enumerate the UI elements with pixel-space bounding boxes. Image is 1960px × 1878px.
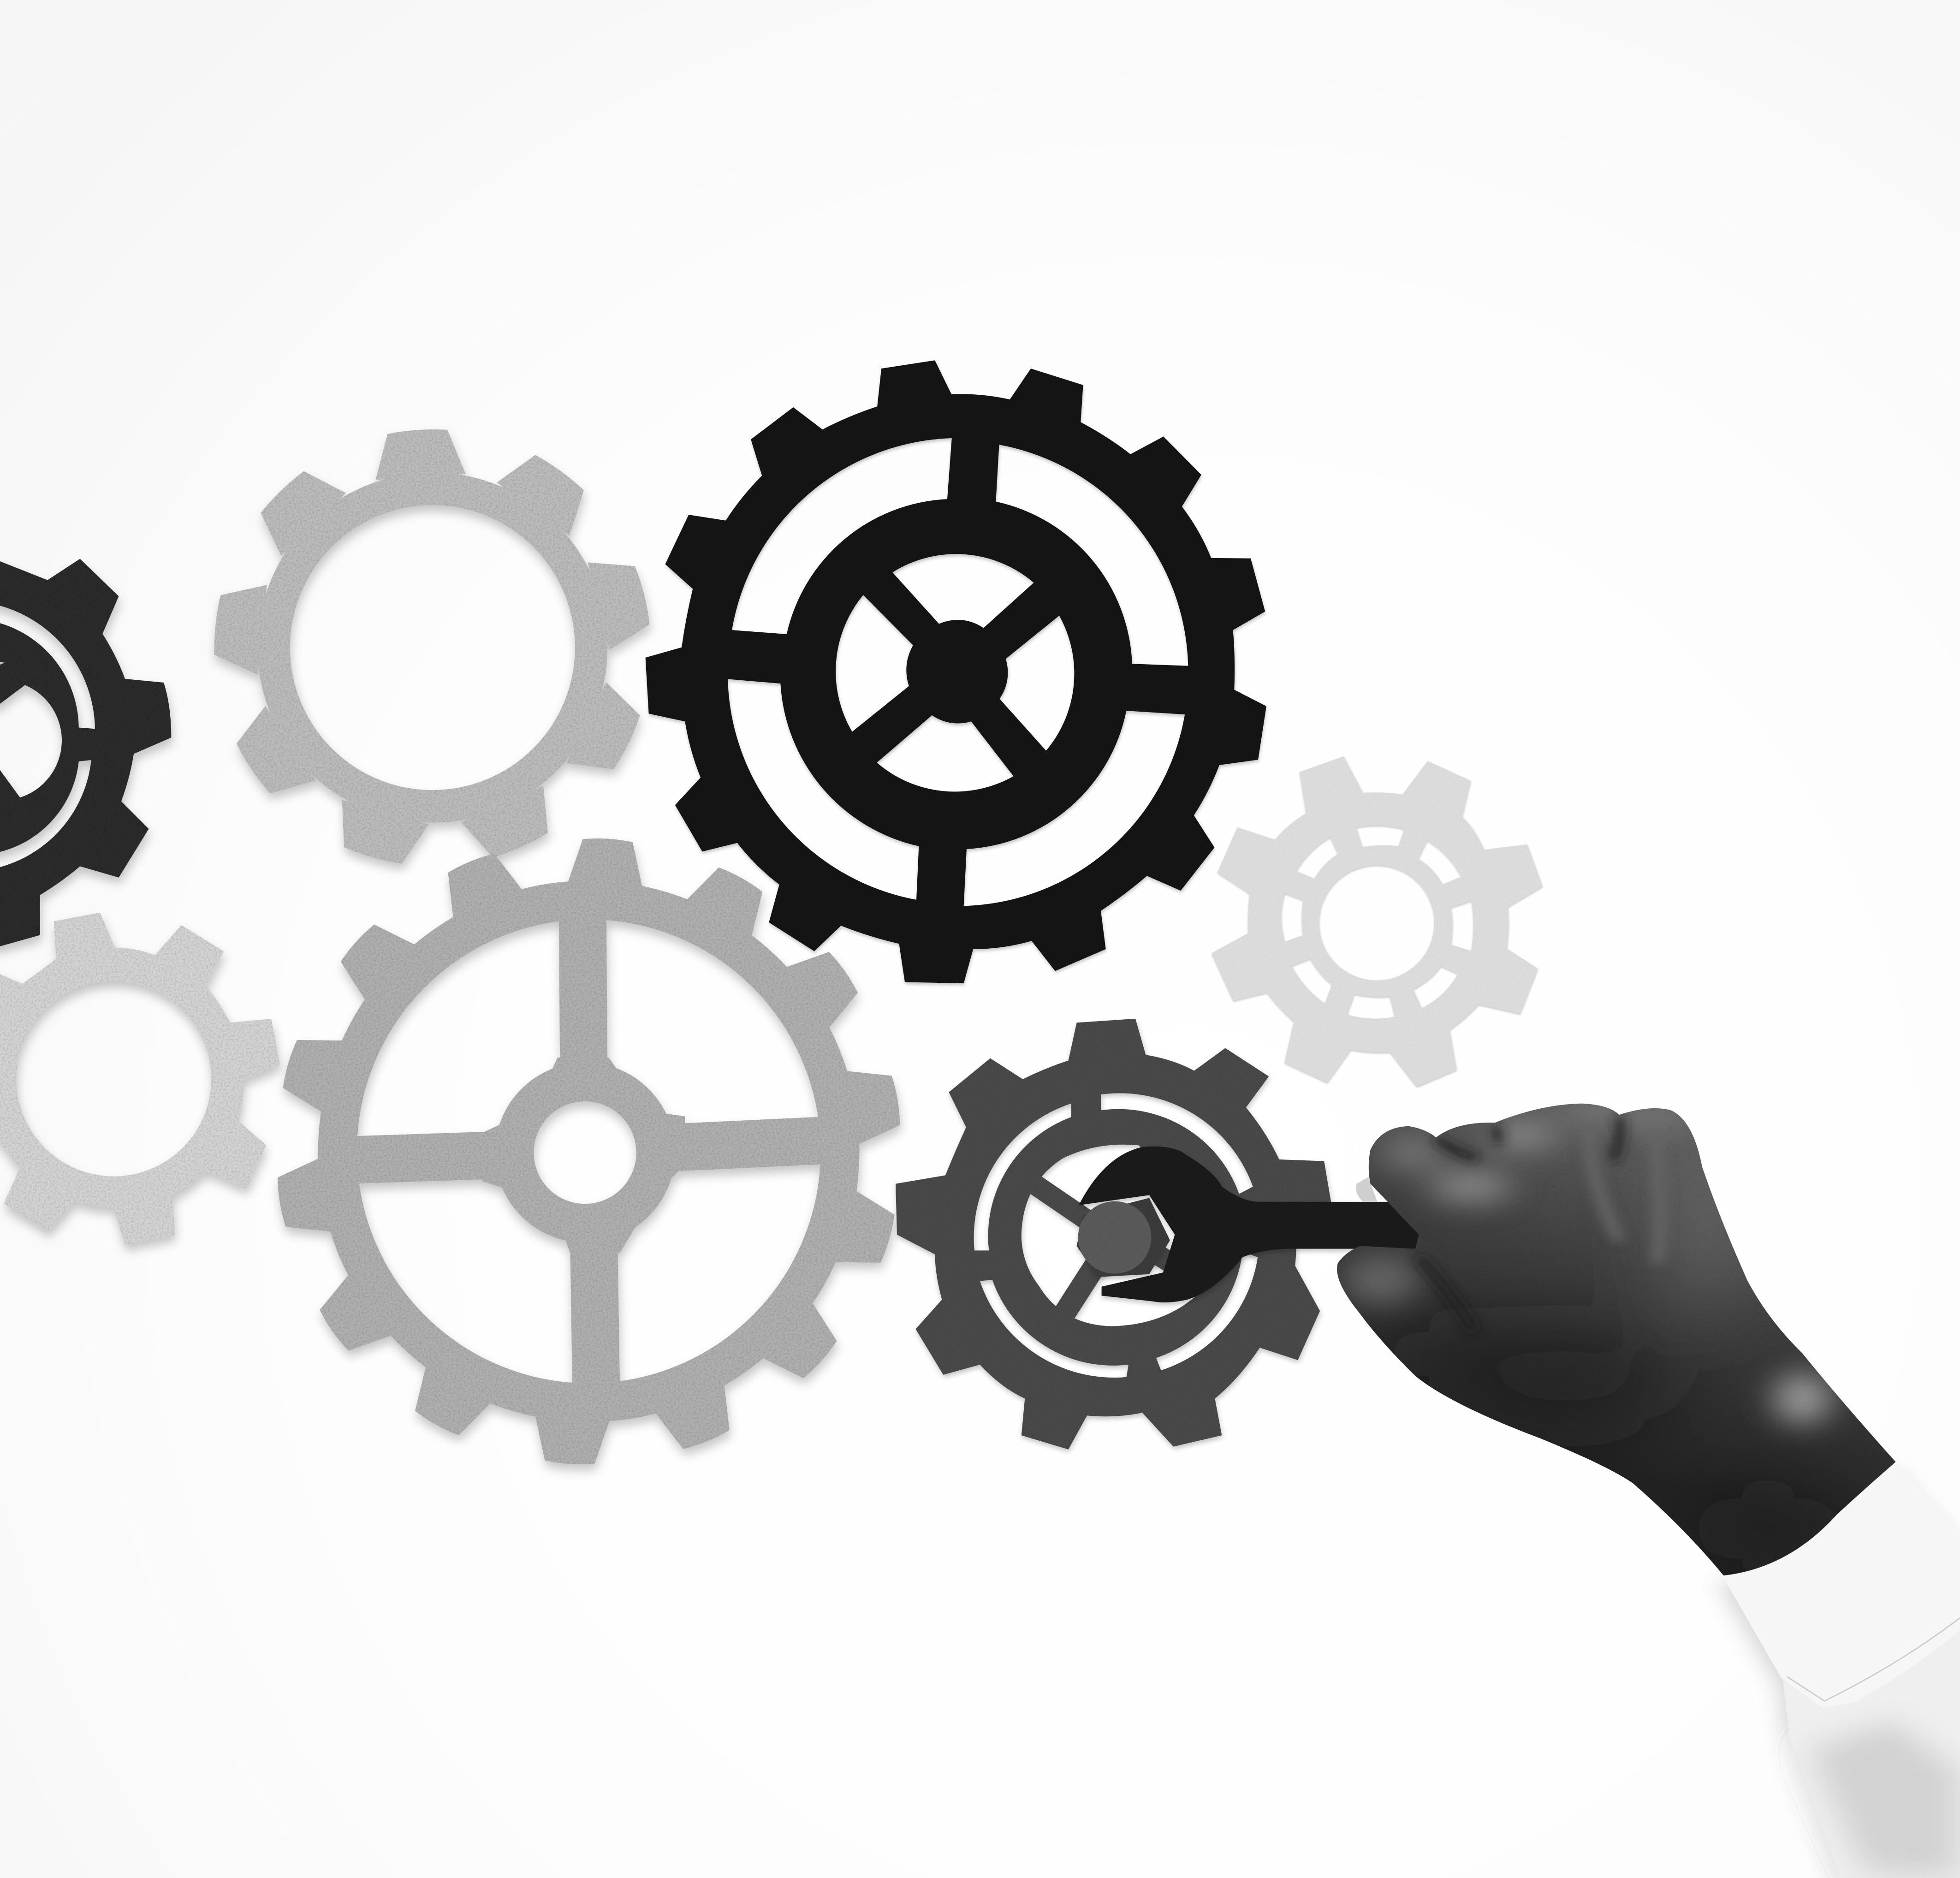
- gear: light grey upper left: [211, 427, 655, 870]
- wrench: [1079, 1147, 1422, 1302]
- cuff stitching: [1787, 1618, 1960, 1701]
- spokes and hub: [348, 906, 831, 1394]
- fingernail: [1356, 1177, 1378, 1202]
- bolt: [1077, 1198, 1170, 1277]
- hand base: [1325, 1094, 1913, 1585]
- knuckle highlights: [1343, 1104, 1831, 1425]
- sleeve fold shading: [1809, 1721, 1960, 1878]
- hand: [1325, 1094, 1913, 1585]
- gear: pale lower left: [0, 913, 280, 1245]
- gear body with slots: [896, 1019, 1331, 1450]
- gear: large grey with four spokes: [273, 837, 904, 1466]
- inner spokes: [1030, 1181, 1184, 1314]
- shirt sleeve: [1723, 1462, 1960, 1878]
- hand tonal shading: [1386, 1168, 1755, 1572]
- bolt head: [1078, 1201, 1151, 1274]
- hub flares: [482, 1058, 685, 1253]
- shirt cuff: [1723, 1462, 1960, 1708]
- gear: large black: [646, 360, 1266, 983]
- sleeve body: [1783, 1625, 1960, 1878]
- gear: palest with slotted ring: [1212, 756, 1543, 1087]
- teeth and rim: [273, 837, 904, 1466]
- gear rim: [274, 489, 591, 806]
- finger creases and tendons: [1419, 1116, 1660, 1331]
- gear: dark, cropped at left edge: [0, 559, 171, 946]
- bolt hex: [1077, 1198, 1170, 1277]
- hand, wrench and gear group: [896, 1019, 1960, 1878]
- gear: dark grey being tightened: [896, 1019, 1331, 1450]
